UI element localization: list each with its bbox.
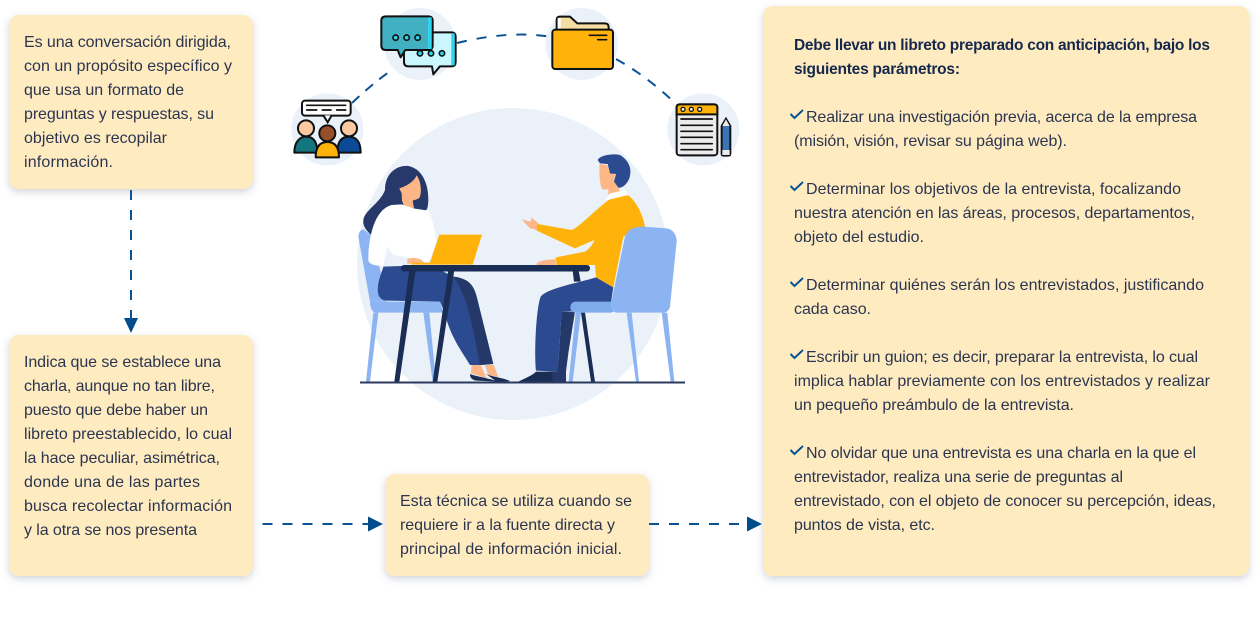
list item: objectives: nuestra atención en las áreas, procesos, departamentos, — [794, 205, 1195, 222]
text block: semi-structured talk: charla, aunque no tan libre, — [24, 378, 215, 395]
text block: semi-structured talk: libreto preestablecido, lo cual — [24, 426, 232, 443]
text block: when to use: principal de información inicial. — [400, 541, 622, 558]
list item: objectives: objeto del estudio. — [794, 229, 924, 246]
text block: semi-structured talk: puesto que debe haber un — [24, 402, 208, 419]
arrow: box three to box four — [649, 516, 762, 532]
heading: script parameters: siguientes parámetros: — [794, 61, 960, 78]
text block: semi-structured talk: busca recolectar información — [24, 498, 232, 515]
list item: script: un pequeño preámbulo de la entrevista. — [794, 397, 1074, 414]
icon: people talking — [291, 93, 363, 165]
illustration: two people at an interview table — [357, 108, 685, 420]
text block: definition: Es una conversación dirigida, — [24, 34, 231, 51]
list item: prior research — [790, 109, 1197, 150]
panel: script parameters — [763, 6, 1249, 576]
list item: script: Escribir un guion; es decir, preparar la entrevista, lo cual — [806, 349, 1198, 366]
list item: interviewees — [790, 277, 1204, 318]
text block: when to use: Esta técnica se utiliza cuando se — [400, 493, 632, 510]
text block: definition: preguntas y respuestas, su — [24, 106, 214, 123]
panel: when to use — [385, 474, 649, 576]
list item: interviewees: Determinar quiénes serán los entrevistados, justificando — [806, 277, 1204, 294]
arrow: box two to box three — [262, 516, 383, 532]
text block: definition: que usa un formato de — [24, 82, 184, 99]
text block: definition — [24, 34, 232, 171]
panel: semi-structured talk — [9, 335, 253, 576]
text block: semi-structured talk — [24, 354, 232, 539]
text block: semi-structured talk: y la otra se nos presenta — [24, 522, 197, 539]
text block: when to use — [400, 493, 632, 558]
background circle — [357, 108, 669, 420]
arrow: box one to box two — [124, 189, 138, 333]
icon: document and pencil — [667, 93, 739, 165]
list item: prior research: (misión, visión, revisar su página web). — [794, 133, 1067, 150]
list item: reminder: entrevistador, realiza una serie de preguntas al — [794, 469, 1123, 486]
list item: interviewees: cada caso. — [794, 301, 871, 318]
text block: definition: con un propósito específico y — [24, 58, 232, 75]
list item: objectives: Determinar los objetivos de la entrevista, focalizando — [806, 181, 1181, 198]
list item: objectives — [790, 181, 1195, 246]
list item: prior research: Realizar una investigación previa, acerca de la empresa — [806, 109, 1197, 126]
table — [394, 265, 590, 382]
dashed arc connecting icons — [352, 35, 680, 108]
list item: reminder: puntos de vista, etc. — [794, 517, 935, 534]
man seated gesturing — [518, 154, 677, 382]
heading: script parameters: Debe llevar un libreto preparado con anticipación, bajo los — [794, 37, 1210, 54]
text block: semi-structured talk: donde una de las partes — [24, 474, 200, 491]
text block: semi-structured talk: Indica que se establece una — [24, 354, 221, 371]
list item: reminder: entrevistado, con el objeto de conocer su percepción, ideas, — [794, 493, 1216, 510]
list item: script: implica hablar previamente con los entrevistados y realizar — [794, 373, 1211, 390]
woman seated with laptop — [358, 166, 510, 382]
text block: definition: objetivo es recopilar — [24, 130, 168, 147]
heading: script parameters — [794, 37, 1210, 78]
text block: semi-structured talk: la hace peculiar, asimétrica, — [24, 450, 220, 467]
icon: chat bubbles — [381, 8, 456, 80]
text block: when to use: requiere ir a la fuente directa y — [400, 517, 615, 534]
icon: folder — [546, 8, 618, 80]
floor line — [360, 382, 685, 384]
panel: definition — [9, 15, 253, 189]
text block: definition: información. — [24, 154, 113, 171]
list item: reminder — [790, 445, 1216, 534]
list item: script — [790, 349, 1211, 414]
list item: reminder: No olvidar que una entrevista es una charla en la que el — [806, 445, 1196, 462]
